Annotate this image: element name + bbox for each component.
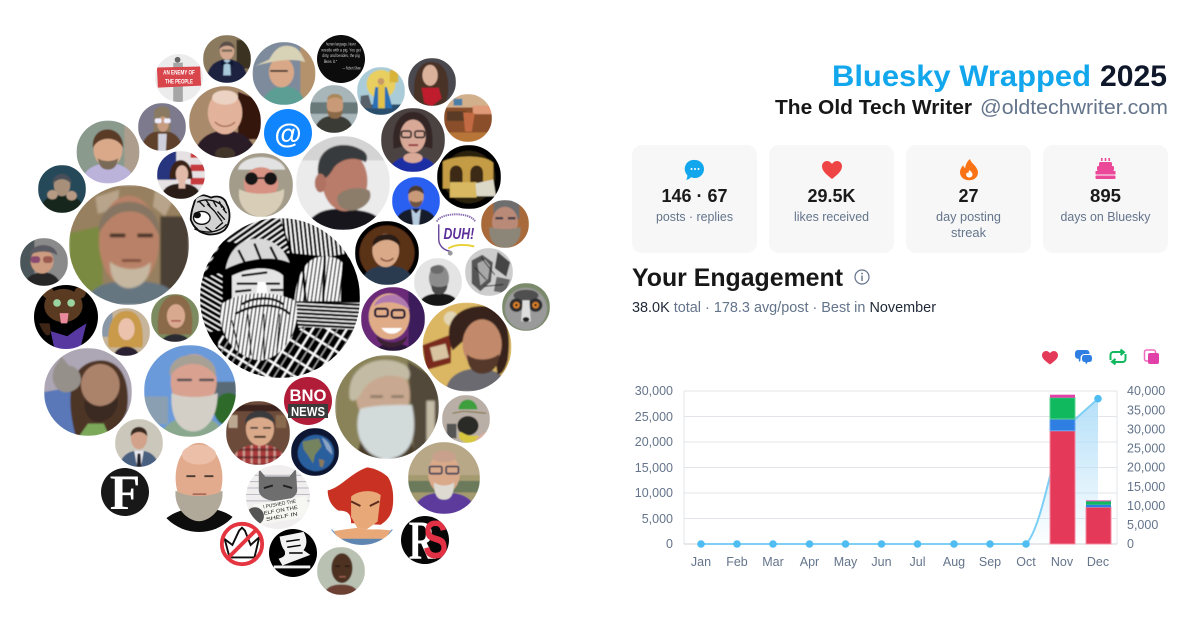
avatar: plaid shirt man [226, 401, 290, 465]
total engagement line [697, 395, 1102, 548]
right axis labels: 0 [1127, 537, 1134, 551]
bar: December [1086, 500, 1111, 544]
avatar: man with dark ring [355, 221, 419, 285]
icon: cake [1096, 158, 1116, 179]
left axis labels [635, 384, 673, 551]
avatar: earth [291, 428, 339, 476]
left axis labels: 0 [666, 537, 673, 551]
avatar: RS logo: R [409, 510, 436, 571]
panel: day posting streak stat: 27 [958, 185, 978, 206]
avatar: an enemy of the people: AN ENEMY OF [163, 70, 195, 77]
left axis labels: 25,000 [635, 410, 673, 424]
avatar: no crown [218, 520, 266, 568]
avatar: man on blue background [392, 177, 440, 225]
avatar: long white beard [335, 355, 439, 459]
avatar: cap and tinted glasses [20, 238, 68, 286]
avatar: bald smiling man [166, 442, 232, 532]
avatar: bald dark-skinned man [317, 547, 365, 595]
panel: posts and replies stat [632, 145, 757, 253]
avatar: glasses and grey beard [481, 200, 529, 248]
avatar: black quote: dirty, and besides, the pig [322, 53, 360, 58]
title: Bluesky Wrapped [832, 60, 1091, 93]
month labels: Mar [762, 555, 784, 569]
avatar: Lion-O cartoon [323, 467, 401, 545]
right axis labels: 25,000 [1127, 442, 1165, 456]
panel: day posting streak stat: day posting [936, 209, 1001, 224]
avatar: lemur [502, 283, 550, 331]
avatar: white sunglasses [138, 103, 186, 151]
right axis labels: 20,000 [1127, 460, 1165, 474]
avatar: BNO News logo: NEWS [291, 404, 325, 419]
avatar: cat in green hat [442, 395, 490, 443]
avatar: black quote: human language. Never [326, 42, 356, 47]
avatar: black quote: wrestle with a pig. You get [321, 47, 361, 52]
month labels: Sep [979, 555, 1001, 569]
month labels: Oct [1016, 555, 1036, 569]
panel: posts and replies stat: 146 · 67 [662, 185, 728, 206]
avatar: pencil sketch [465, 248, 513, 296]
avatar: BNO News logo [284, 377, 332, 425]
icon: heart [822, 161, 842, 179]
user name and handle: The Old Tech Writer [775, 96, 972, 119]
icon: speech bubble [685, 160, 704, 180]
engagement summary text: 38.0K total · 178.3 avg/post · Best in November [632, 300, 936, 316]
avatar: building balcony [437, 145, 501, 209]
avatar: black quote [317, 35, 365, 83]
avatar: yellow knight [357, 67, 405, 115]
avatar: sunglasses white beard [229, 153, 293, 217]
avatar: woman with flag [157, 151, 205, 199]
user name and handle: @oldtechwriter.com [980, 96, 1168, 119]
panel: day posting streak stat [906, 145, 1031, 253]
month labels: Jan [691, 555, 711, 569]
avatar: painted hat man [252, 42, 316, 105]
right axis labels: 40,000 [1127, 384, 1165, 398]
avatar: purple shirt man [408, 442, 480, 514]
month labels: May [834, 555, 858, 569]
avatar: woodcut bearded man (main) [200, 218, 360, 378]
avatar: bowtie man [203, 35, 251, 83]
avatar: man in suit [115, 419, 163, 467]
icon: legend quotes [1144, 350, 1159, 364]
panel: likes stat [769, 145, 894, 253]
chart: monthly engagement [635, 384, 1165, 569]
icon: info [855, 270, 869, 284]
panel: days on Bluesky stat [1043, 145, 1168, 253]
avatar: profile with moustache [296, 136, 390, 230]
avatar: man with hands at face [38, 165, 86, 213]
avatar: F logo [101, 464, 149, 520]
avatar: mosaic room [444, 94, 492, 142]
heading: your engagement: Your Engagement [632, 264, 844, 292]
avatar: black ship [269, 529, 317, 577]
panel: likes stat: likes received [794, 209, 869, 224]
avatar: black quote: likes it." [324, 59, 338, 64]
avatar: black quote: — Robert Shaw [342, 66, 361, 71]
area under total line [1026, 399, 1098, 544]
right axis labels: 5,000 [1127, 518, 1158, 532]
left axis labels: 10,000 [635, 486, 673, 500]
avatar: curly hair selfie [422, 302, 512, 392]
month labels: Nov [1051, 555, 1074, 569]
month labels: Jun [871, 555, 892, 569]
icon: legend reposts [1110, 350, 1126, 364]
avatar: smiling bearded man [76, 120, 140, 184]
icon: flame [960, 159, 978, 180]
icon: legend replies [1075, 350, 1092, 364]
avatar: woman in glasses [381, 108, 445, 172]
avatar: brown-haired woman [151, 294, 199, 342]
avatar: BNO News logo: BNO [290, 386, 326, 405]
avatar: bald man [189, 86, 261, 160]
panel: avatar bubble cluster [20, 35, 550, 595]
avatar: RS logo: S [423, 510, 448, 570]
month labels: Apr [800, 555, 819, 569]
panel: days on Bluesky stat: days on Bluesky [1060, 209, 1151, 224]
left axis labels: 20,000 [635, 435, 673, 449]
right axis labels: 30,000 [1127, 422, 1165, 436]
panel: days on Bluesky stat: 895 [1090, 185, 1121, 206]
left axis labels: 15,000 [635, 461, 673, 475]
avatar: black and white bald man [414, 258, 462, 306]
month labels: Dec [1087, 555, 1109, 569]
panel: posts and replies stat: posts · replies [656, 209, 733, 224]
right axis labels [1127, 384, 1165, 551]
month labels: Feb [726, 555, 748, 569]
avatar: an enemy of the people [155, 54, 203, 102]
user name and handle [775, 96, 1168, 119]
avatar: bear with book [34, 285, 98, 349]
avatar: F logo: F [110, 464, 140, 520]
avatar: DUH logo: DUH! [444, 226, 474, 243]
avatar: DUH logo [436, 213, 476, 256]
avatar: long hair with cat [44, 348, 132, 436]
panel: day posting streak stat: streak [951, 225, 986, 240]
icon: legend heart [1042, 351, 1058, 364]
avatar: cat mugshot: SHELF IN [266, 511, 299, 523]
avatar: cat mugshot: ELF ON THE [263, 505, 299, 517]
avatar: purple-lit man with glasses [361, 287, 425, 351]
title: 2025 [1100, 60, 1167, 93]
avatar: woman red scarf [408, 58, 456, 106]
bar: November [1050, 395, 1075, 544]
avatar: man by lake [310, 85, 358, 133]
avatar: large man portrait [69, 185, 189, 305]
avatar: blonde woman [102, 308, 150, 356]
left axis labels: 30,000 [635, 384, 673, 398]
right axis labels: 10,000 [1127, 499, 1165, 513]
right axis labels: 35,000 [1127, 404, 1165, 418]
month labels [691, 555, 1109, 569]
left axis labels: 5,000 [642, 512, 673, 526]
avatar: at sign: @ [274, 118, 302, 149]
avatar: bear sketch [190, 194, 230, 236]
right axis labels: 15,000 [1127, 480, 1165, 494]
avatar: an enemy of the people: THE PEOPLE [165, 78, 193, 85]
month labels: Aug [943, 555, 965, 569]
avatar: grey beard and glasses [144, 345, 243, 437]
avatar: cat mugshot: I PUSHED THE [263, 499, 297, 510]
chart legend [1042, 350, 1159, 364]
panel: likes stat: 29.5K [808, 185, 856, 206]
month labels: Jul [910, 555, 925, 569]
avatar: cat mugshot [246, 465, 310, 529]
avatar: at sign [264, 109, 312, 157]
